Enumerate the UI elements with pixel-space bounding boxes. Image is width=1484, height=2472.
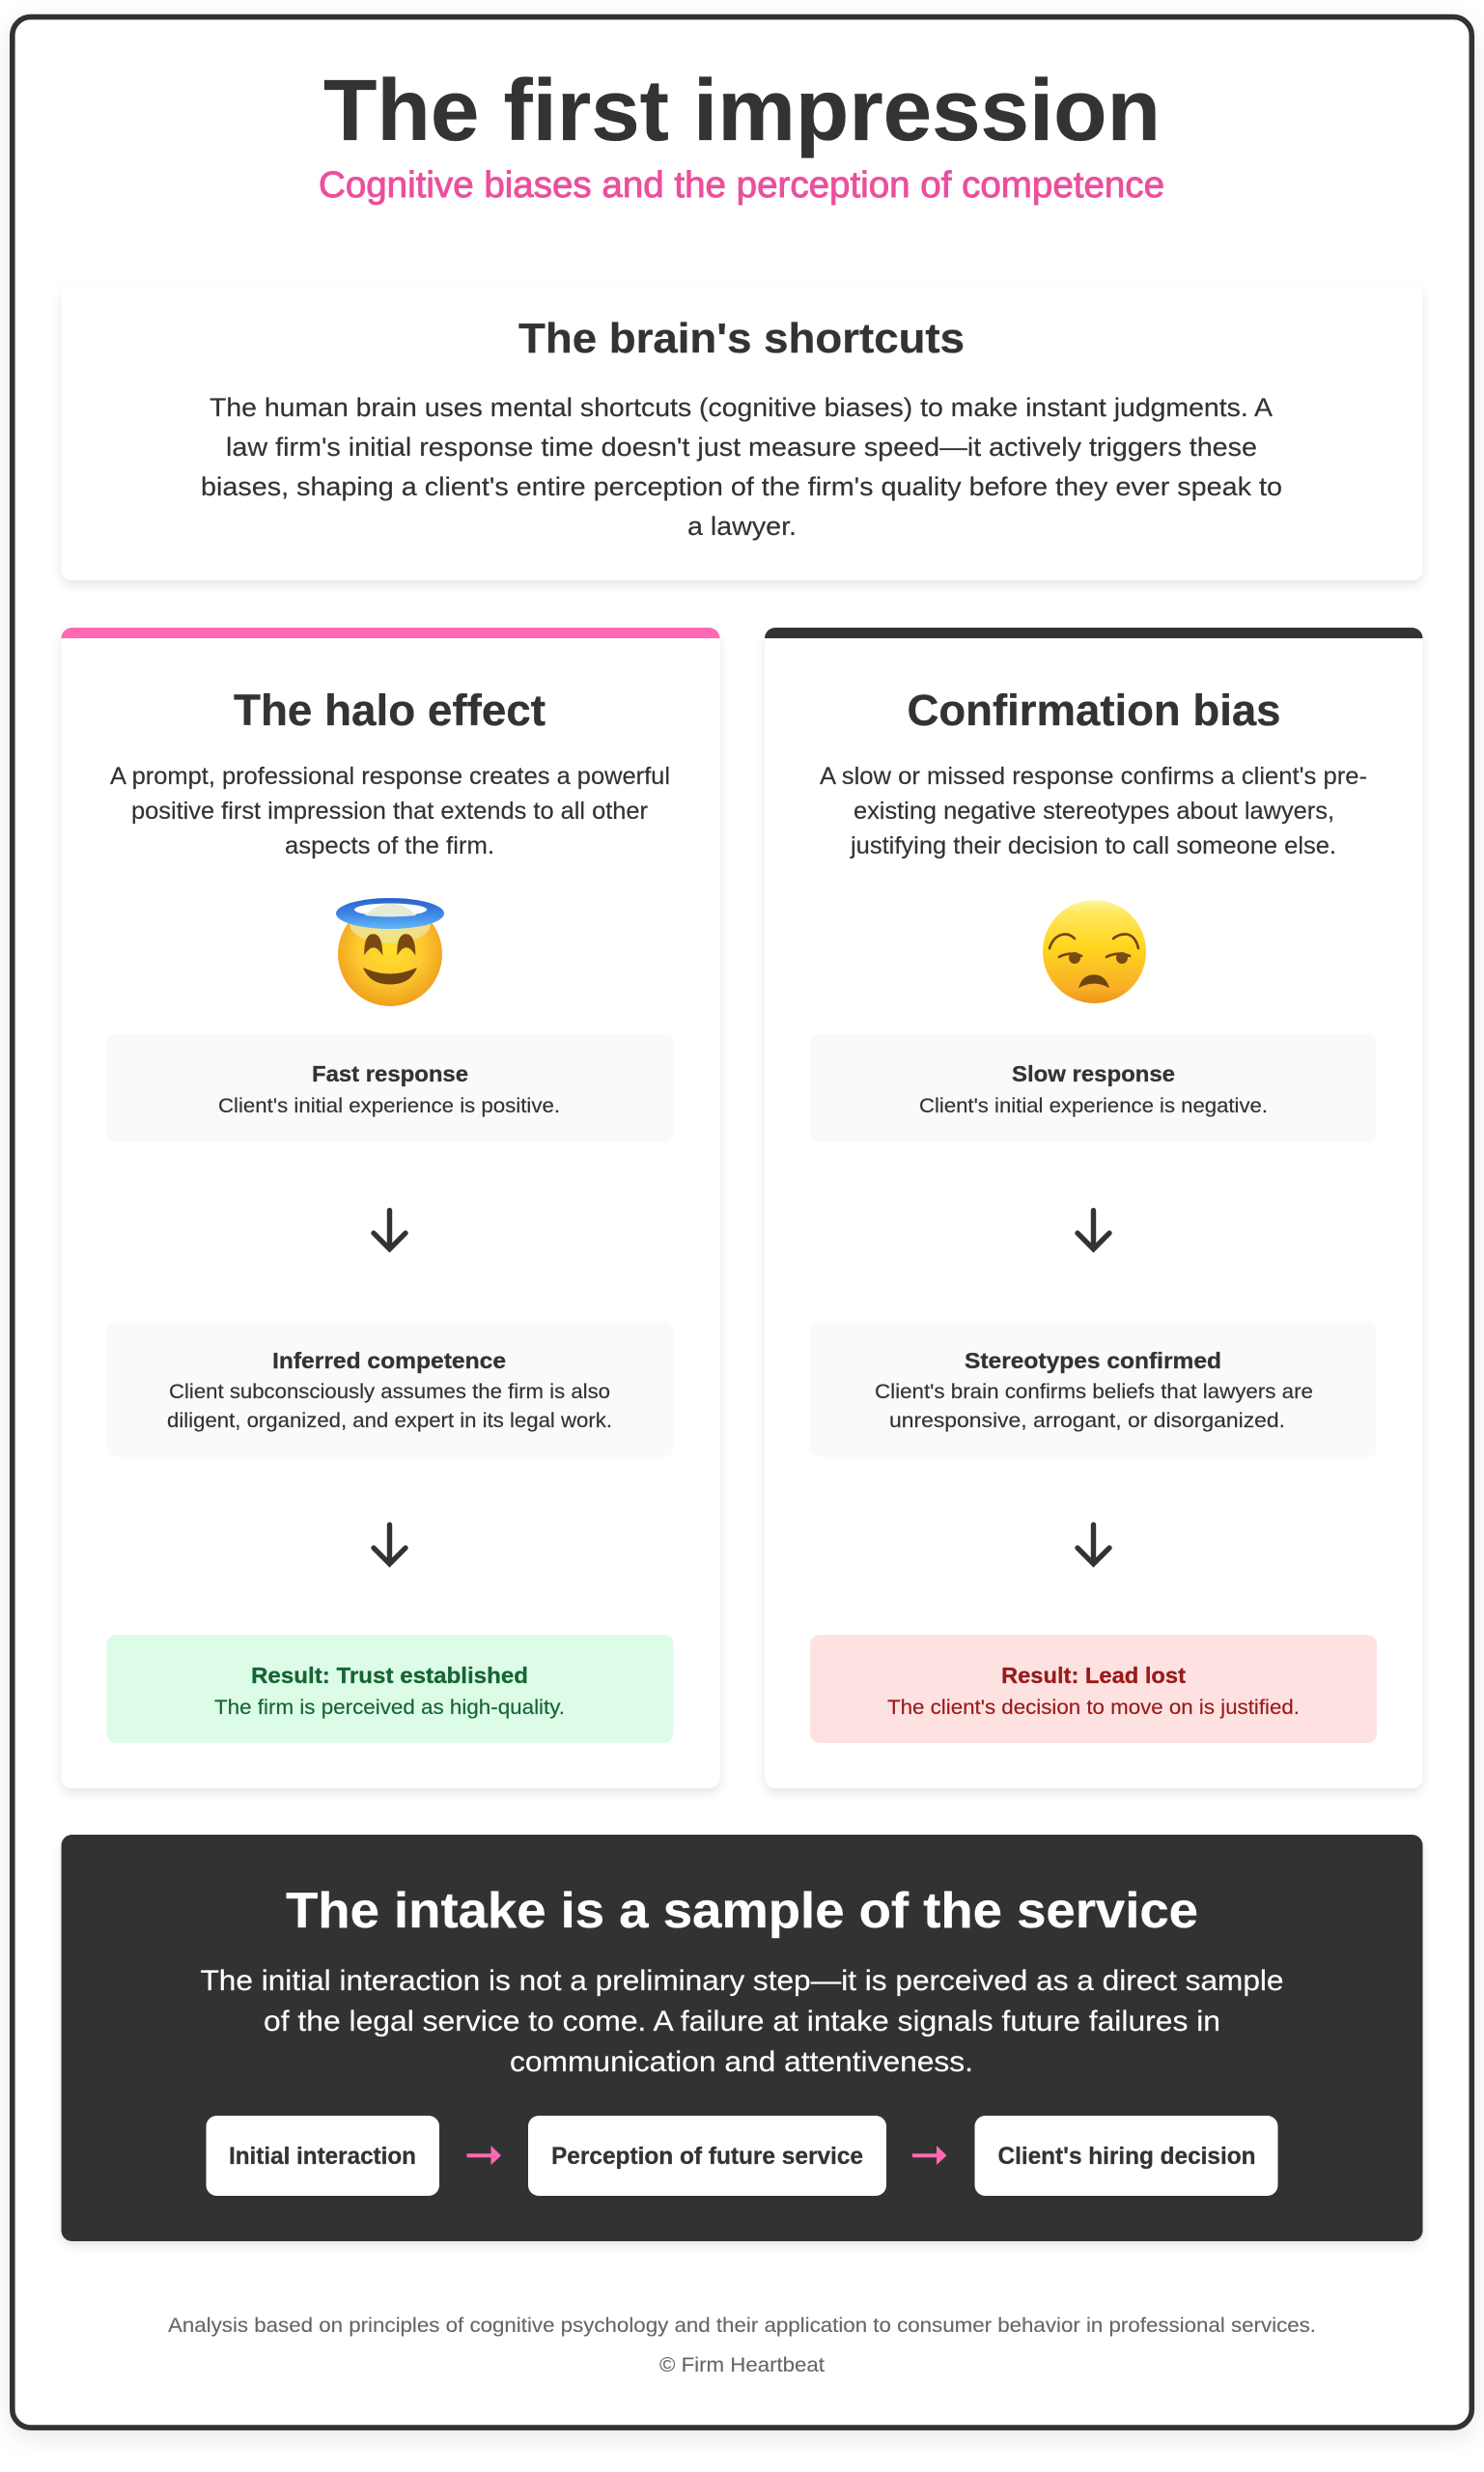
step: inferred competence: diligent, organized, and expert in its legal work. — [167, 1409, 612, 1432]
flow: client's hiring decision — [975, 2116, 1278, 2196]
step: stereotypes confirmed — [810, 1321, 1377, 1457]
step: stereotypes confirmed: Client's brain confirms beliefs that lawyers are — [875, 1380, 1313, 1403]
result: lead lost: The client's decision to move on is justified. — [887, 1696, 1300, 1719]
header — [319, 63, 1164, 206]
footer — [168, 2315, 1316, 2376]
step: stereotypes confirmed: unresponsive, arrogant, or disorganized. — [889, 1409, 1285, 1432]
pink top bar — [62, 628, 720, 638]
result: trust established: The firm is perceived as high-quality. — [214, 1696, 565, 1719]
result: trust established — [106, 1635, 674, 1743]
confirmation paragraph: existing negative stereotypes about lawyers, — [854, 798, 1334, 825]
result: lead lost: Result: Lead lost — [1001, 1663, 1186, 1688]
confirmation paragraph — [820, 763, 1367, 859]
intro paragraph: law firm's initial response time doesn't just measure speed—it actively triggers these — [226, 433, 1257, 462]
heading: the brain's shortcuts: The brain's shortcuts — [518, 315, 965, 362]
flow: perception of future service: Perception of future service — [551, 2143, 863, 2170]
subtitle: Cognitive biases and the perception of competence — [319, 165, 1164, 206]
step: stereotypes confirmed: Stereotypes confirmed — [965, 1348, 1221, 1373]
step: inferred competence — [106, 1321, 674, 1457]
step: inferred competence: Client subconsciously assumes the firm is also — [169, 1380, 610, 1403]
halo paragraph — [110, 763, 670, 859]
halo paragraph: A prompt, professional response creates a powerful — [110, 763, 670, 790]
step: slow response: Client's initial experience is negative. — [919, 1094, 1268, 1117]
step: fast response: Client's initial experience is positive. — [218, 1094, 560, 1117]
heading: the halo effect: The halo effect — [234, 686, 546, 735]
result: trust established: Result: Trust established — [251, 1663, 528, 1688]
intro paragraph: a lawyer. — [687, 512, 797, 541]
intro paragraph: The human brain uses mental shortcuts (cognitive biases) to make instant judgments. A — [210, 393, 1273, 422]
flow: initial interaction — [207, 2116, 439, 2196]
panel: confirmation bias — [765, 628, 1423, 1788]
icon: unamused face — [1043, 900, 1146, 1003]
step: fast response — [106, 1033, 674, 1142]
flow: client's hiring decision: Client's hiring decision — [998, 2143, 1255, 2170]
confirmation paragraph: A slow or missed response confirms a client's pre- — [820, 763, 1367, 790]
source note: Analysis based on principles of cognitive psychology and their application to consumer behavior in professional services. — [168, 2315, 1316, 2337]
arrow: down — [374, 1211, 406, 1250]
arrow: right — [467, 2146, 501, 2165]
step: inferred competence: Inferred competence — [272, 1348, 506, 1373]
intake paragraph: of the legal service to come. A failure at intake signals future failures in — [264, 2006, 1220, 2037]
step: slow response: Slow response — [1012, 1061, 1175, 1086]
panel: the halo effect — [62, 628, 720, 1788]
halo paragraph: aspects of the firm. — [285, 832, 494, 859]
confirmation paragraph: justifying their decision to call someone else. — [850, 832, 1336, 859]
intake paragraph: communication and attentiveness. — [510, 2046, 973, 2078]
icon: smiling face with halo — [336, 898, 444, 1006]
panel: the brain's shortcuts — [62, 284, 1423, 580]
intro paragraph — [201, 393, 1282, 541]
intake paragraph — [201, 1965, 1284, 2078]
halo paragraph: positive first impression that extends to all other — [131, 798, 648, 825]
heading: intake: The intake is a sample of the service — [286, 1883, 1198, 1939]
arrow: down — [1078, 1525, 1109, 1564]
panel: the intake is a sample of the service — [62, 1835, 1423, 2241]
arrow: down — [374, 1525, 406, 1564]
step: fast response: Fast response — [312, 1061, 468, 1086]
arrow: right — [912, 2146, 946, 2165]
dark top bar — [765, 628, 1423, 638]
intro paragraph: biases, shaping a client's entire perception of the firm's quality before they ever speak to — [201, 472, 1282, 501]
copyright: © Firm Heartbeat — [659, 2354, 825, 2376]
title: The first impression — [323, 63, 1161, 159]
flow: perception of future service — [528, 2116, 886, 2196]
flow: initial interaction: Initial interaction — [229, 2143, 416, 2170]
heading: confirmation bias: Confirmation bias — [908, 686, 1280, 735]
step: slow response — [810, 1033, 1377, 1142]
intake paragraph: The initial interaction is not a preliminary step—it is perceived as a direct sample — [201, 1965, 1284, 1997]
result: lead lost — [810, 1635, 1377, 1743]
arrow: down — [1078, 1211, 1109, 1250]
